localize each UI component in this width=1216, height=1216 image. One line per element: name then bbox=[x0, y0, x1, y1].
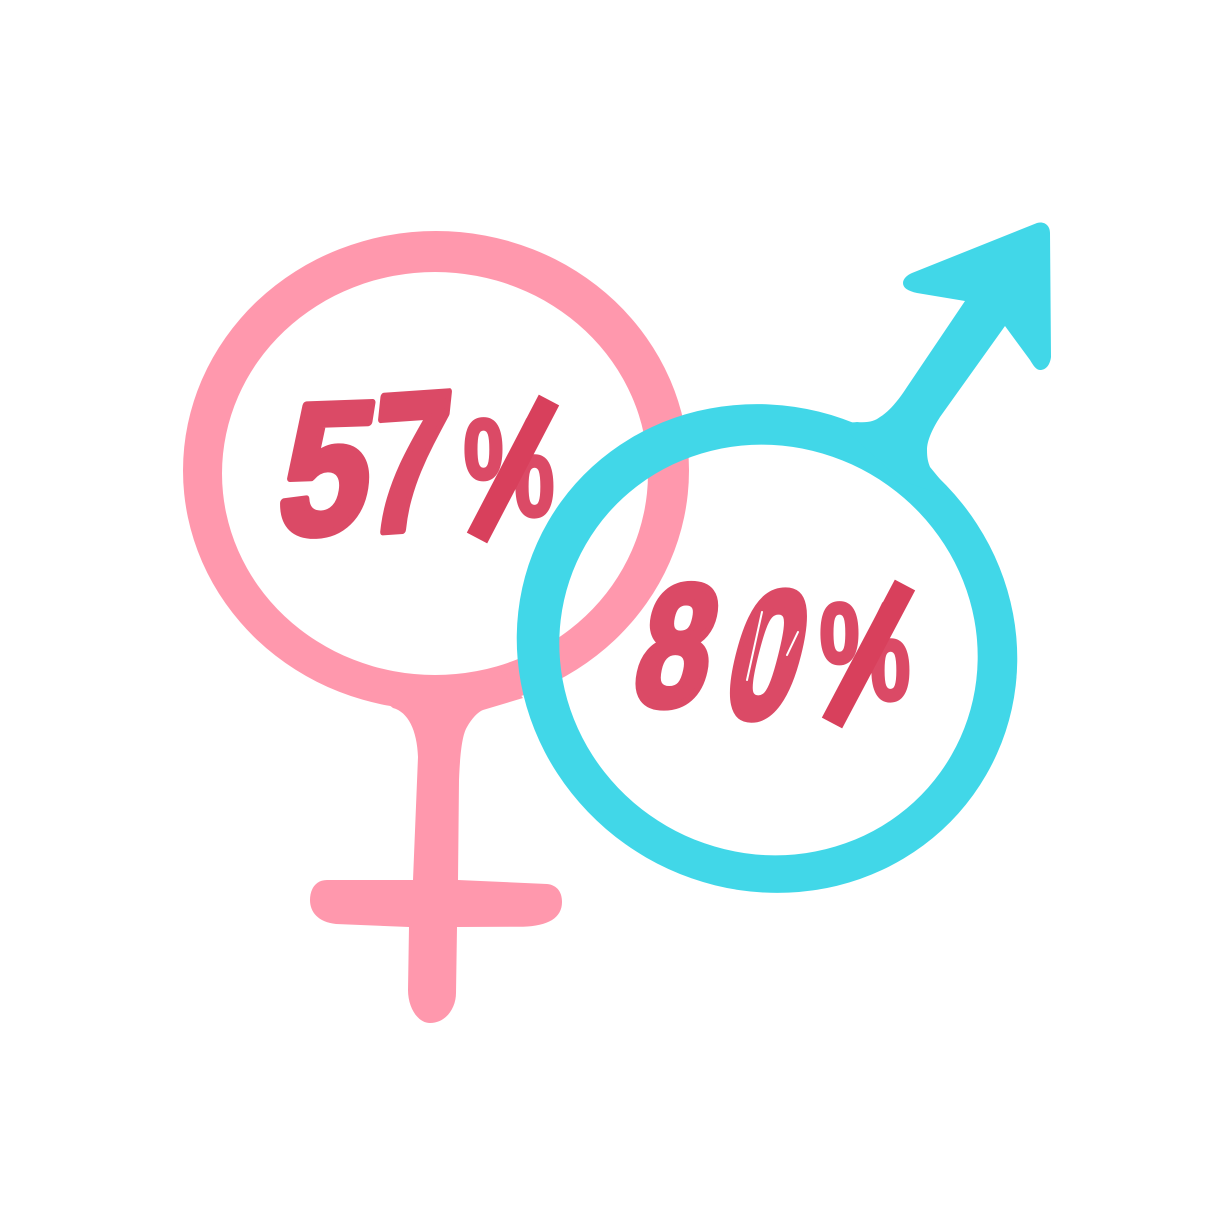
text: 80 percent bbox=[621, 550, 911, 756]
text: 57 percent: 7 bbox=[359, 351, 460, 575]
icon: female symbol bbox=[183, 231, 689, 1023]
text: 57 percent bbox=[267, 351, 555, 575]
text: 80 percent: % bbox=[819, 575, 911, 731]
text: 80 percent: 0 bbox=[708, 554, 829, 756]
text: 57 percent: % bbox=[463, 391, 555, 547]
text: 57 percent: 5 bbox=[267, 363, 389, 575]
icon: male symbol bbox=[517, 223, 1051, 893]
text: 80 percent: 8 bbox=[621, 550, 734, 742]
